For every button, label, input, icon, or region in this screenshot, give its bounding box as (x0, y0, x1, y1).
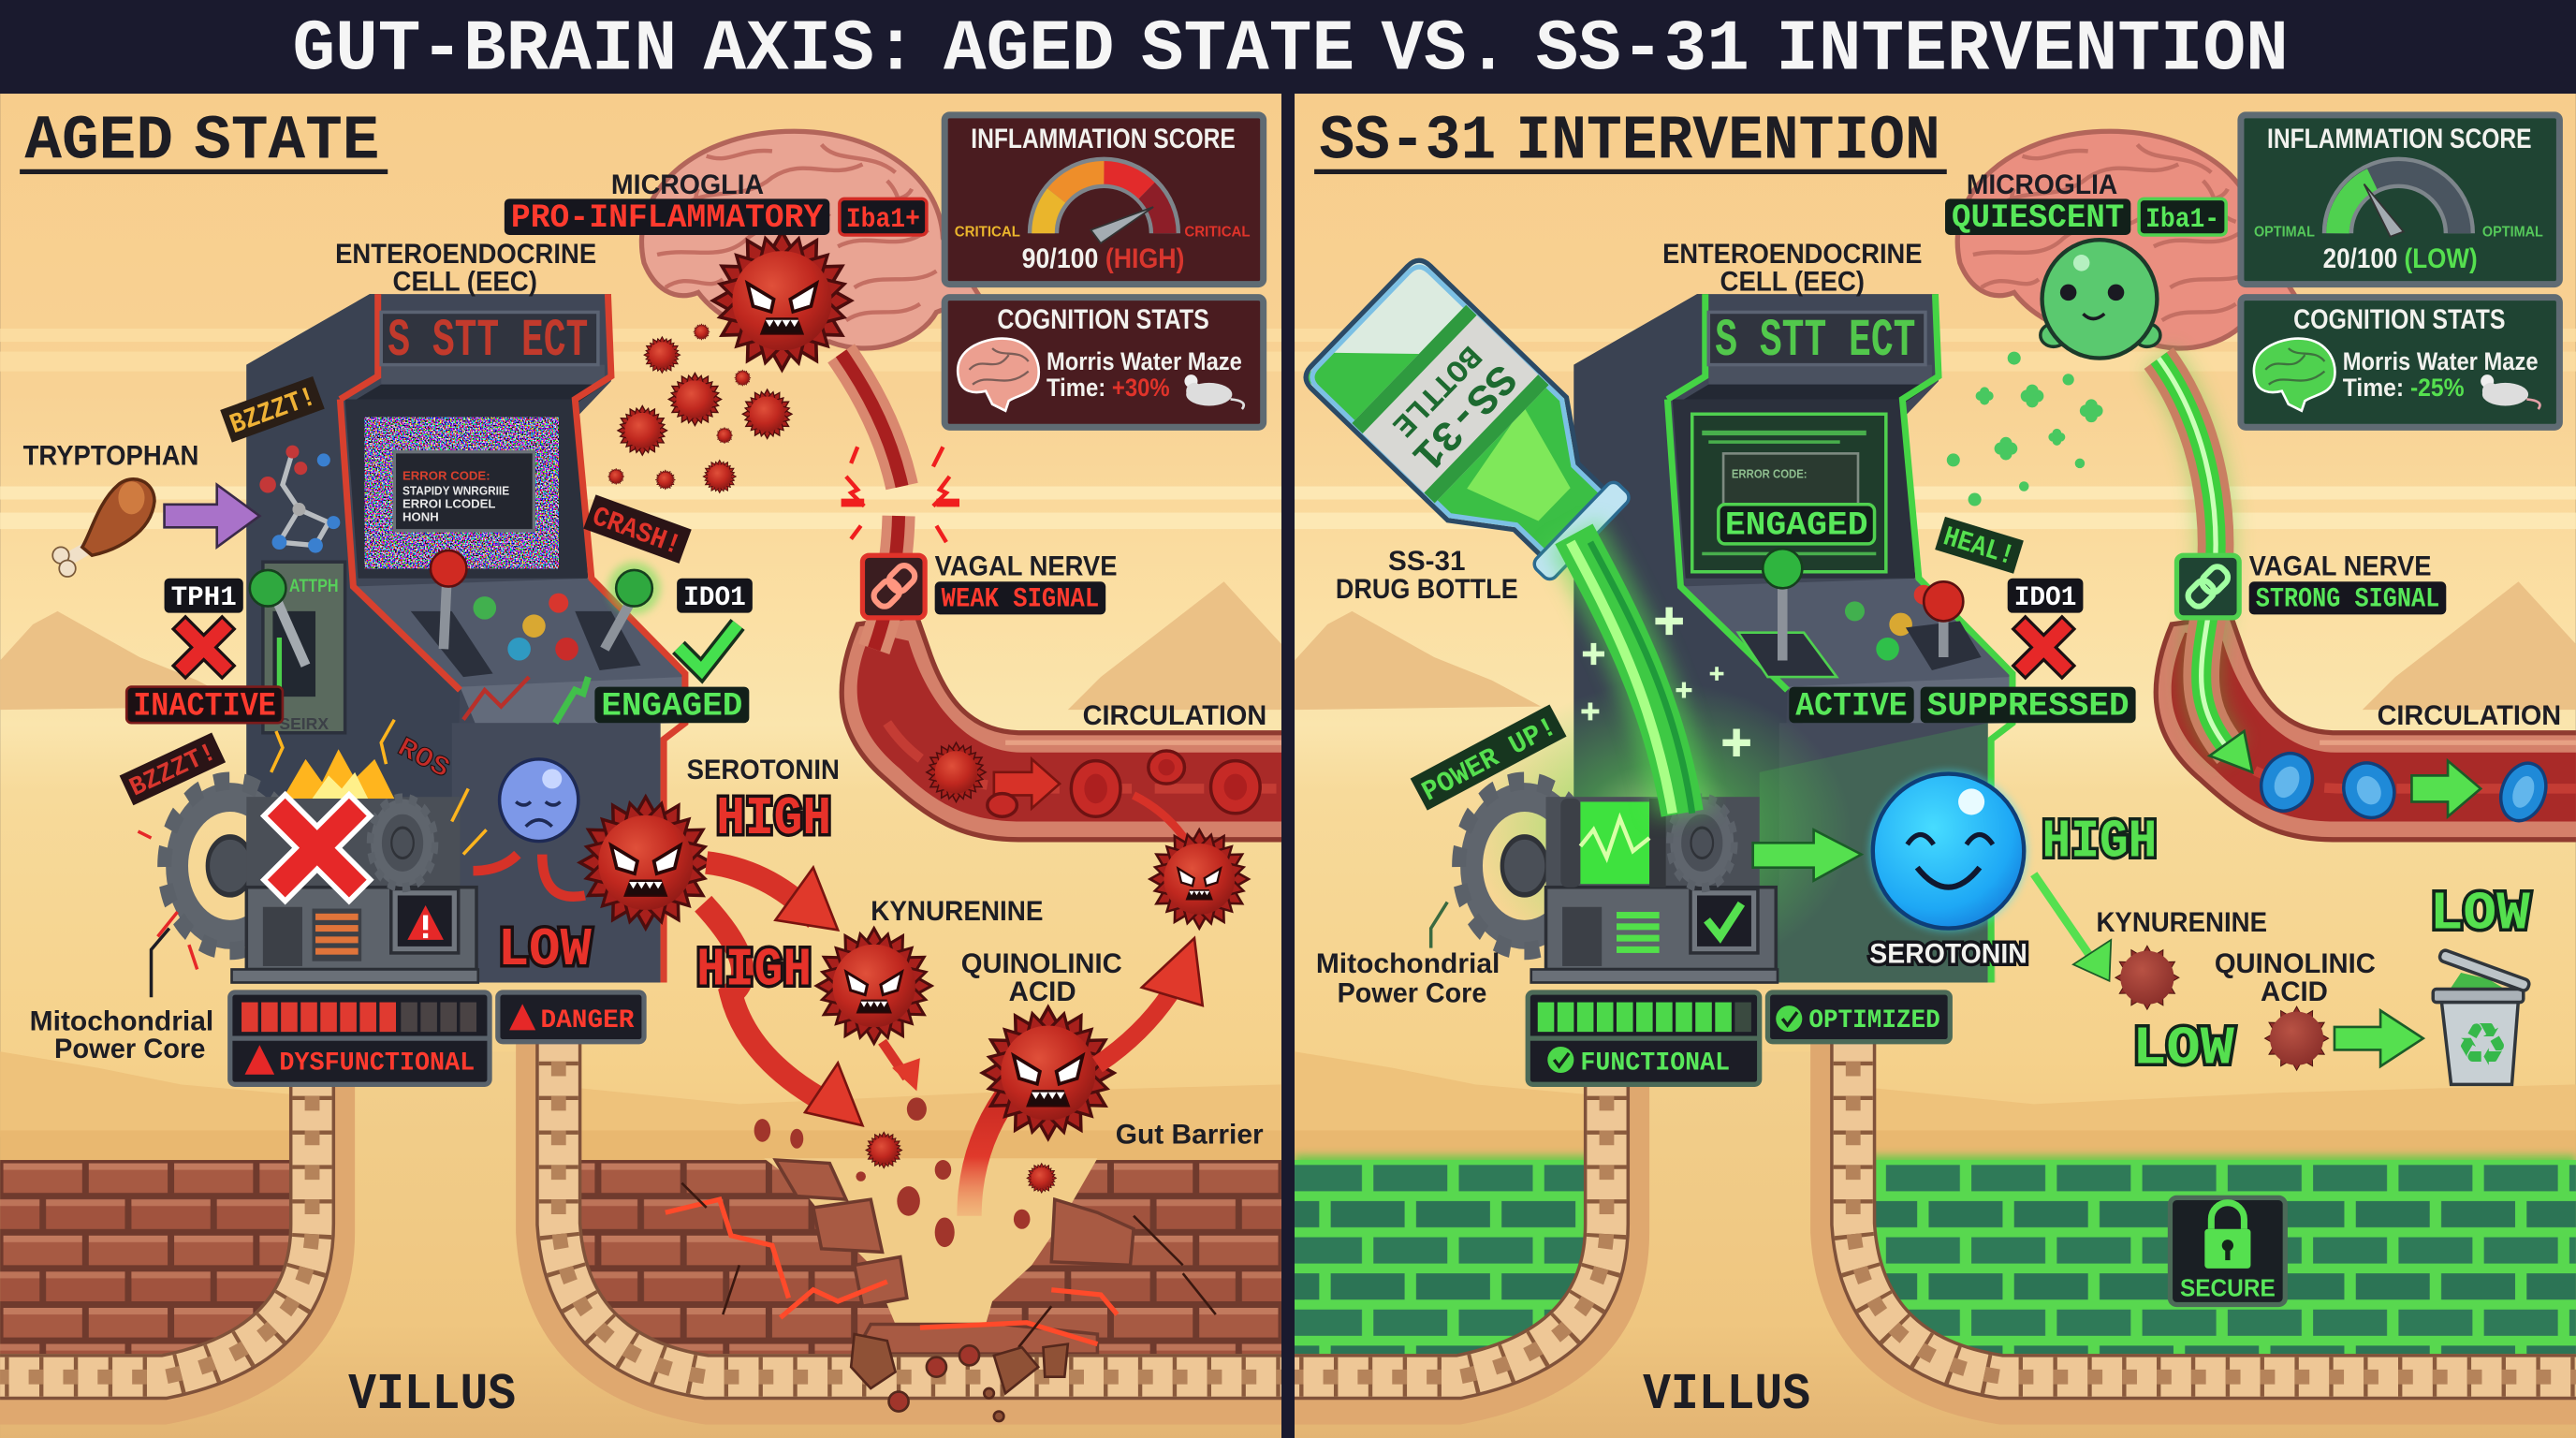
static screen (365, 418, 559, 568)
panel: SS-31 intervention (1286, 94, 2576, 1438)
label: gut barrier: Gut Barrier (1116, 1119, 1264, 1150)
leader line (152, 929, 169, 997)
label: mitochondrial power core: Power Core (1338, 978, 1486, 1009)
label: low: LOW (2132, 1020, 2234, 1080)
healthy screen (1692, 414, 1886, 572)
label: microglia: PRO-INFLAMMATORY (511, 199, 823, 237)
label: quinolinic acid: QUINOLINIC (961, 948, 1122, 979)
virus particles (607, 323, 796, 495)
badge: secure (2170, 1197, 2285, 1304)
icon: brain (2254, 339, 2334, 411)
arrow: to gut barrier (703, 903, 862, 1125)
status: health bar dysfunctional (230, 992, 490, 1084)
panel: cognition stats: Morris Water Maze (2343, 346, 2539, 375)
virus: serotonin pathway (571, 787, 721, 937)
badge: secure: SECURE (2180, 1274, 2276, 1302)
arrow: to circulation (1097, 938, 1203, 1064)
static screen: STAPIDY WNRGRIIE (402, 483, 509, 497)
icon: recycle bin (2433, 949, 2530, 1084)
TPH1 lever panel (250, 562, 345, 733)
circulation vessel (842, 616, 1314, 846)
panel: inflammation score (944, 115, 1264, 285)
status: health bar functional (1528, 992, 1760, 1084)
IDO1 tag: IDO1 (683, 581, 746, 613)
label: quinolinic acid: QUINOLINIC (2215, 948, 2376, 979)
label: drug bottle (1336, 546, 1518, 605)
label: serotonin high: HIGH (716, 789, 831, 850)
heading: aged state: AGED STATE (24, 106, 379, 177)
panel: inflammation score (2241, 115, 2559, 285)
label: kynurenine: KYNURENINE (871, 896, 1044, 927)
callout: ROS: ROS (392, 731, 455, 785)
heading: SS-31 intervention: SS-31 INTERVENTION (1319, 106, 1940, 177)
label: quinolinic acid (2215, 948, 2376, 1007)
icon: mouse (2481, 374, 2539, 409)
callout: BZZZT red: BZZZT! (125, 739, 221, 803)
icon: red X IDO1 (2013, 617, 2074, 678)
arrow: power to serotonin (1753, 829, 1862, 881)
villus (1286, 1027, 2576, 1438)
SUPPRESSED tag: SUPPRESSED (1927, 687, 2130, 725)
mitochondrial power core: healthy (1459, 781, 1778, 983)
label: microglia: Iba1+ (846, 203, 920, 235)
label: drug bottle: DRUG BOTTLE (1336, 574, 1518, 605)
label: microglia: MICROGLIA (1967, 169, 2117, 200)
ID01 tag: IDO1 (2014, 581, 2076, 613)
title bar: GUT-BRAIN AXIS: AGED STATE VS. SS-31 INTERVENTION (292, 10, 2289, 92)
bottle label text: SS-31 (1401, 353, 1525, 479)
status: danger: DANGER (540, 1006, 635, 1035)
label: low: LOW (2430, 885, 2530, 946)
vagal nerve: strong (2159, 359, 2231, 753)
label: enteroendocrine cell (335, 239, 596, 298)
INACTIVE tag: INACTIVE (133, 687, 276, 725)
vagal nerve: broken (842, 353, 959, 649)
rubble (851, 1334, 1068, 1421)
label: serotonin: SEROTONIN (1869, 938, 2027, 969)
panel: inflammation score: CRITICAL (955, 225, 1020, 241)
healthy screen: ERROR CODE: (1732, 467, 1808, 481)
icon: mouse (1184, 374, 1244, 409)
villus (0, 1027, 1290, 1438)
blob: low serotonin (500, 759, 578, 842)
arrow: to trash (2334, 1010, 2423, 1066)
gut barrier: damaged brick wall (0, 1158, 1281, 1354)
label: mitochondrial power core (30, 1005, 213, 1064)
panel: cognition stats: COGNITION STATS (997, 304, 1209, 335)
label: serotonin high (687, 755, 840, 850)
label: enteroendocrine cell: ENTEROENDOCRINE (1662, 239, 1922, 270)
villus: VILLUS (348, 1367, 516, 1424)
particles: healing (1947, 352, 2103, 506)
icon: molecule (259, 446, 340, 553)
static screen: HONH (402, 509, 439, 523)
label: microglia: QUIESCENT (1952, 199, 2124, 237)
arrows: serotonin loop (474, 855, 585, 897)
gauge (1044, 172, 1164, 233)
debris particles (754, 1097, 1059, 1247)
arcade cabinet: EEC: S STT ECT (388, 311, 588, 371)
drug bottle (1300, 255, 1650, 601)
label: vagal nerve: STRONG SIGNAL (2256, 583, 2439, 615)
controls (1738, 549, 1982, 677)
arrow: to kynurenine (2034, 874, 2111, 981)
label: serotonin high: SEROTONIN (687, 755, 840, 785)
label: mitochondrial power core: Mitochondrial (1316, 948, 1500, 979)
arrow: to kynurenine (707, 862, 838, 930)
mitochondrial power core: damaged (138, 720, 487, 983)
circulation vessel (2156, 616, 2576, 840)
status: optimized: OPTIMIZED (1808, 1006, 1940, 1035)
ENGAGED tag: ENGAGED (601, 687, 742, 725)
brain (1957, 131, 2295, 348)
label: vagal nerve: VAGAL NERVE (2249, 550, 2431, 581)
ENGAGED tag on screen: ENGAGED (1725, 506, 1868, 544)
arrow: kynurenine down (883, 1042, 920, 1091)
panel: cognition stats: Time: +30% (1046, 373, 1170, 402)
virus: dull kynurenine (2115, 946, 2179, 1009)
icon: broken link (862, 555, 925, 618)
icon: brain (958, 339, 1039, 411)
brain (641, 131, 979, 348)
arcade cabinet: EEC: S STT ECT (1715, 311, 1915, 371)
label: serotonin low: LOW (498, 920, 592, 981)
circulation vessel: CIRCULATION (1083, 700, 1266, 731)
microglia: pro-inflammatory virus (703, 222, 860, 379)
panel: cognition stats (2241, 298, 2559, 427)
status: optimized (1767, 992, 1950, 1042)
sparkles (1581, 608, 1750, 756)
panel: cognition stats (944, 298, 1264, 427)
icon: red X TPH1 (173, 617, 234, 678)
callout: BZZZT yellow: BZZZT! (226, 381, 320, 441)
icon: recycle bin: ♻ (2456, 1009, 2509, 1078)
label: microglia: MICROGLIA (611, 169, 764, 200)
panel: aged state (0, 94, 1314, 1438)
lower cabinet glow rays (1760, 723, 1996, 983)
swoosh arrow from breach (970, 1097, 1005, 1216)
tryptophan label: TRYPTOPHAN (23, 441, 198, 472)
control panel (411, 550, 661, 723)
arcade cabinet: EEC (1573, 294, 2014, 983)
icon: drumstick (52, 479, 154, 577)
icon: link (2176, 555, 2239, 618)
panel: cognition stats: COGNITION STATS (2293, 304, 2505, 335)
label: enteroendocrine cell: CELL (EEC) (1720, 267, 1865, 298)
panel: cognition stats: Morris Water Maze (1046, 346, 1242, 375)
callout: crash: CRASH! (588, 501, 685, 562)
label: enteroendocrine cell (1662, 239, 1922, 298)
TPH1 lever panel: ATTPH (289, 577, 339, 596)
label: vagal nerve (935, 550, 1117, 615)
blob: happy serotonin (1869, 770, 2027, 932)
panel: inflammation score: CRITICAL (1184, 225, 1251, 241)
label: vagal nerve: WEAK SIGNAL (942, 583, 1099, 615)
gauge (2337, 172, 2459, 233)
panel: inflammation score: OPTIMAL (2254, 225, 2315, 241)
burst glow (1473, 682, 1852, 977)
label: drug bottle: SS-31 (1388, 546, 1466, 577)
label: vagal nerve (2249, 550, 2446, 615)
leader line (1431, 902, 1447, 948)
label: quinolinic acid: ACID (1009, 976, 1076, 1007)
label: enteroendocrine cell: CELL (EEC) (393, 267, 537, 298)
arrow: tryptophan into cabinet (165, 485, 259, 547)
label: second high: HIGH (696, 940, 812, 1001)
status: health bar dysfunctional: DYSFUNCTIONAL (279, 1049, 475, 1078)
pouring stream (1571, 534, 1692, 814)
gut barrier: intact glowing wall (1295, 1155, 2576, 1356)
static screen: ERROI LCODEL (402, 496, 495, 510)
label: kynurenine: KYNURENINE (2096, 907, 2267, 938)
arrowhead: nerve (2210, 731, 2252, 772)
virus: dull quinolinic (2265, 1006, 2329, 1070)
arcade cabinet: EEC (246, 294, 687, 983)
panel: inflammation score: INFLAMMATION SCORE (971, 124, 1236, 154)
label: vagal nerve: VAGAL NERVE (935, 550, 1117, 581)
virus: in circulation (1143, 823, 1255, 935)
virus: quinolinic acid (973, 998, 1123, 1148)
TPH1 lever panel: SEIRX (279, 714, 329, 733)
label: enteroendocrine cell: ENTEROENDOCRINE (335, 239, 596, 270)
status: health bar functional: FUNCTIONAL (1580, 1049, 1730, 1078)
circulation vessel: CIRCULATION (2378, 700, 2561, 731)
panel: inflammation score: 90/100 (HIGH) (1022, 243, 1184, 274)
icon: green check (679, 624, 738, 670)
label: high: HIGH (2042, 812, 2157, 873)
panel: cognition stats: Time: -25% (2343, 373, 2465, 402)
bottle label text: BOTTLE (1383, 337, 1487, 443)
callout: power up: POWER UP! (1417, 711, 1562, 808)
label: mitochondrial power core: Mitochondrial (30, 1005, 213, 1036)
panel: inflammation score: OPTIMAL (2482, 225, 2543, 241)
ACTIVE tag: ACTIVE (1795, 687, 1908, 725)
label: quinolinic acid: ACID (2261, 976, 2328, 1007)
status: danger (498, 992, 644, 1042)
label: microglia (1945, 169, 2226, 237)
static screen: ERROR CODE: (402, 468, 490, 482)
label: mitochondrial power core (1316, 948, 1500, 1009)
label: quinolinic acid (961, 948, 1122, 1007)
label: mitochondrial power core: Power Core (54, 1034, 205, 1064)
label: microglia: Iba1- (2145, 203, 2219, 235)
microglia: quiescent blob (2041, 240, 2160, 359)
TPH1 tag: TPH1 (171, 581, 237, 613)
panel: inflammation score: 20/100 (LOW) (2323, 243, 2478, 274)
villus: VILLUS (1643, 1367, 1810, 1424)
callout: heal: HEAL! (1939, 521, 2018, 572)
label: microglia (505, 169, 927, 237)
virus: kynurenine (809, 920, 940, 1051)
